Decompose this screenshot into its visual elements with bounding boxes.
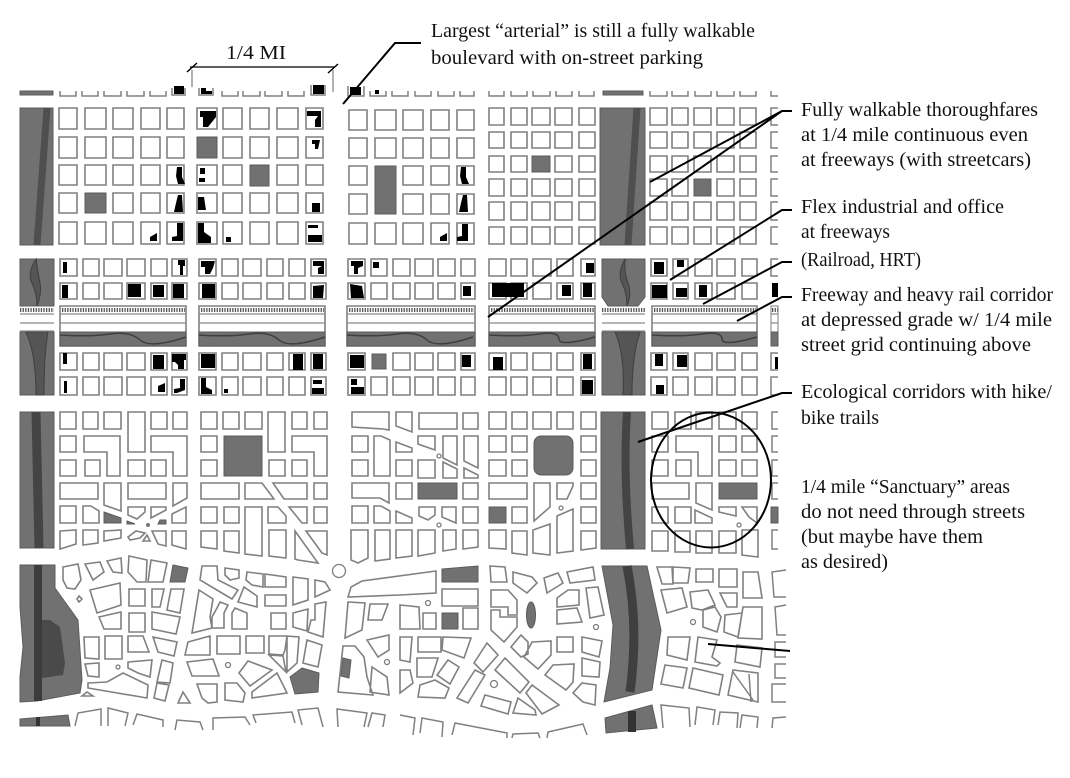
callout: largest arterial: boulevard with on-street parking (431, 47, 703, 69)
callout: ecological corridors: bike trails (801, 407, 879, 429)
callout: freeway and rail corridor: Freeway and heavy rail corridor (801, 284, 1053, 306)
blocks: sanctuary second group (201, 412, 327, 563)
gray parks, sanctuary rows (104, 436, 778, 527)
gray parks, organic district (170, 565, 536, 694)
callout: flex industrial: at freeways (801, 221, 890, 243)
callout: ecological corridors (638, 381, 1052, 442)
text: sanctuary areas (801, 476, 1025, 573)
callout: freeway and rail corridor: at depressed grade w/ 1/4 mile (801, 309, 1052, 331)
callout: walkable thoroughfares: at freeways (with streetcars) (801, 149, 1031, 171)
irregular blocks: left organic district (63, 556, 190, 703)
callout: walkable thoroughfares (488, 99, 1038, 317)
callout: railroad (703, 249, 921, 304)
blocks: rail corridor upper rows (60, 259, 757, 299)
blocks: upper second grid (197, 108, 323, 244)
callout: flex industrial: Flex industrial and office (801, 196, 1004, 218)
blocks: rail corridor lower rows (60, 353, 757, 395)
ecological corridors (20, 108, 661, 733)
traffic circles and small round plazas (116, 454, 741, 688)
text: sanctuary areas: (but maybe have them (801, 526, 983, 548)
gray block in rail corridor row (372, 354, 386, 369)
blocks: upper third grid (349, 110, 474, 244)
irregular blocks: fourth organic district (457, 566, 604, 715)
east edge partial blocks (733, 570, 786, 702)
bottom row partial blocks (75, 705, 786, 738)
black buildings on upper blocks (150, 85, 469, 243)
callout: flex industrial (670, 196, 1004, 280)
blocks: sanctuary fifth group (652, 412, 758, 557)
leader line: lower right (708, 644, 790, 651)
irregular blocks: east organic district (657, 567, 762, 702)
irregular blocks: second organic district (185, 566, 330, 703)
freeway and heavy rail corridor (20, 306, 778, 346)
panel: street grid plan (20, 85, 786, 738)
blocks: upper-left grid (59, 108, 184, 244)
gray open space blocks, upper map (85, 137, 711, 214)
callout: ecological corridors: Ecological corridors with hike/ (801, 381, 1052, 403)
blocks: upper fifth grid (650, 108, 756, 244)
dimension label: 1/4 MI (226, 42, 286, 64)
right edge partial blocks (771, 108, 778, 549)
callout: sanctuary circle (651, 412, 771, 548)
text: sanctuary areas: as desired) (801, 551, 888, 573)
blocks: sanctuary fourth group (489, 412, 596, 555)
callout: freeway and rail corridor (737, 284, 1053, 356)
callout: walkable thoroughfares: Fully walkable thoroughfares (801, 99, 1038, 121)
irregular blocks: third organic district (338, 571, 478, 698)
callout: freeway and rail corridor: street grid continuing above (801, 334, 1031, 356)
callout: largest arterial (343, 20, 755, 104)
black buildings on corridor blocks (62, 260, 778, 394)
callout: largest arterial: Largest “arterial” is still a fully walkable (431, 20, 755, 42)
callout: walkable thoroughfares: at 1/4 mile continuous even (801, 124, 1028, 146)
blocks: upper fourth grid (489, 108, 595, 244)
text: sanctuary areas: do not need through streets (801, 501, 1025, 523)
callout: railroad: (Railroad, HRT) (801, 249, 921, 271)
text: sanctuary areas: 1/4 mile “Sanctuary” areas (801, 476, 1010, 498)
blocks: sanctuary third group (351, 412, 478, 563)
blocks: sanctuary left group (60, 412, 187, 549)
dimension: 1/4 mile span (187, 42, 338, 92)
top stub blocks (20, 85, 778, 96)
